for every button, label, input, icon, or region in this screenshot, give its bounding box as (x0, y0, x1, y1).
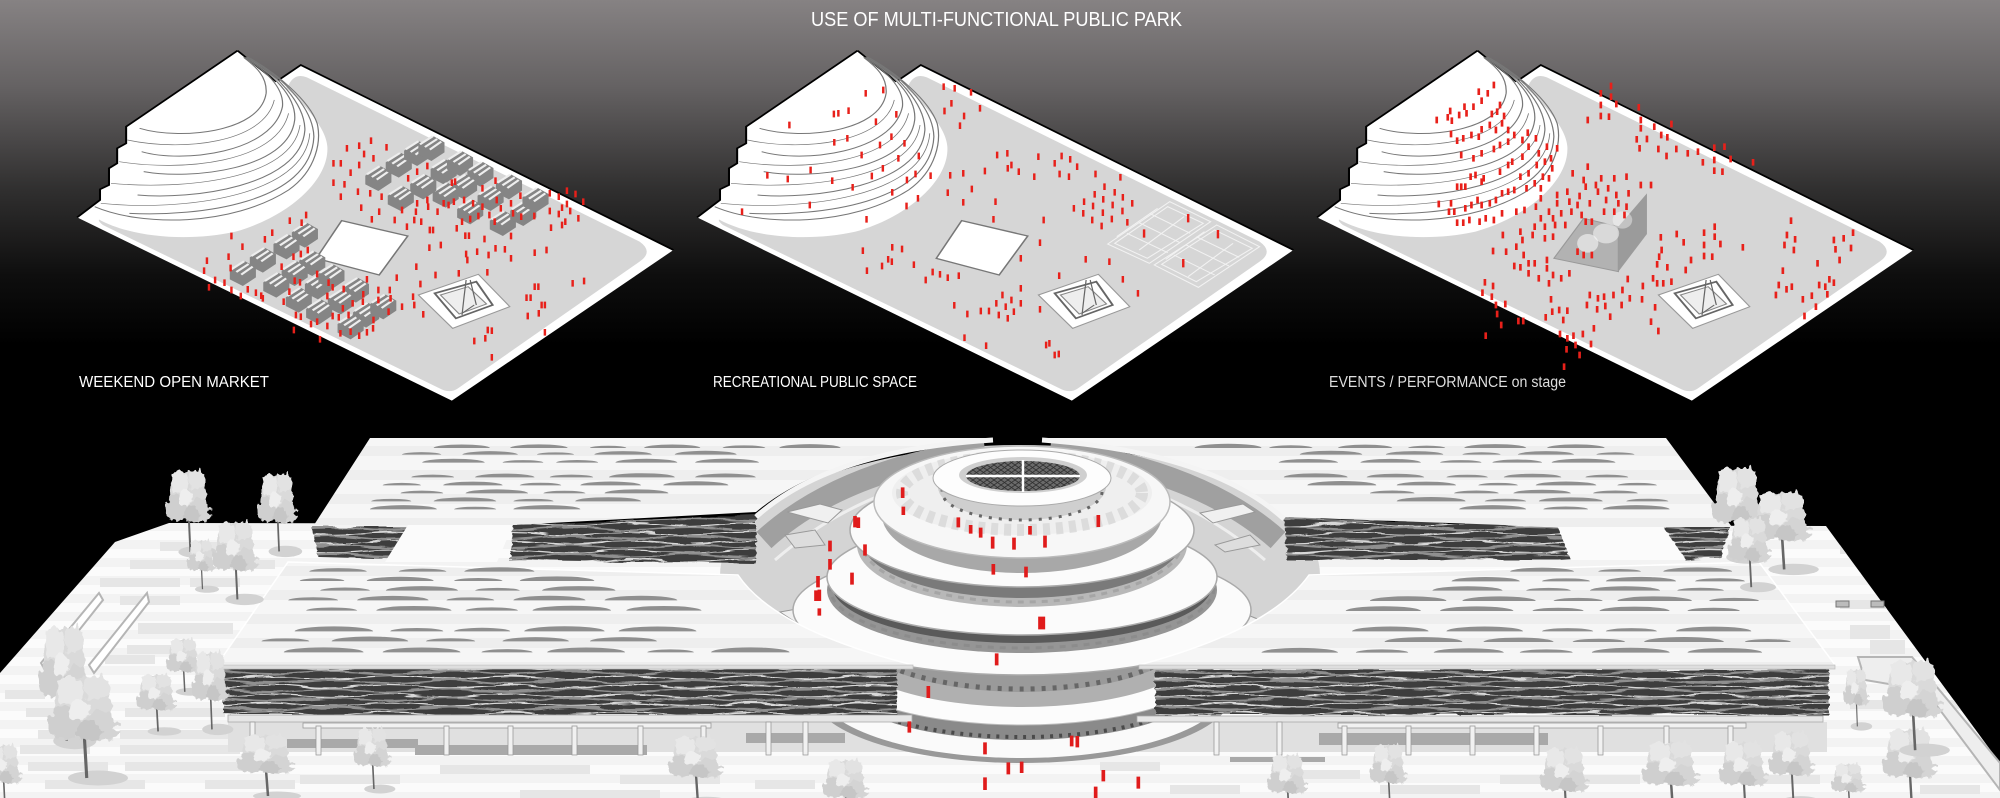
market stalls (230, 136, 549, 339)
sports courts (1108, 202, 1260, 287)
panel: weekend open market (77, 51, 673, 401)
label: weekend open market: WEEKEND OPEN MARKET (79, 374, 270, 391)
skylights front left (261, 567, 790, 652)
top ring (933, 450, 1111, 506)
roof fascias (217, 665, 1835, 669)
red people on building (816, 487, 1138, 798)
ring gallery (756, 440, 1284, 560)
skylight (966, 461, 1080, 491)
panel: events and performance on stage (1317, 51, 1913, 401)
benches (1836, 601, 1884, 607)
columns and beams (250, 722, 1746, 755)
skylights back left (370, 444, 841, 509)
tier 4 garden (874, 446, 1170, 558)
ramps (41, 593, 2000, 790)
label: recreational public space: RECREATIONAL PUBLIC SPACE (713, 374, 917, 391)
label: events performance on stage: EVENTS / PERFORMANCE on stage (1329, 374, 1566, 391)
stage (1554, 193, 1647, 272)
back roof right (1042, 438, 1732, 527)
red people (1437, 82, 1853, 370)
front roof left (217, 562, 913, 665)
slabs (228, 715, 1823, 722)
plaza ground (0, 520, 2000, 798)
tier 3 (850, 473, 1194, 587)
base tiers (812, 623, 1232, 763)
trees right (1267, 467, 1950, 798)
trees left (0, 470, 874, 798)
front facade left (223, 668, 897, 715)
red people (742, 83, 1218, 358)
skylights front right (1261, 567, 1791, 653)
back facade left end (312, 527, 408, 559)
link bridge (385, 525, 513, 562)
panel: building perspective (0, 438, 2000, 798)
title: USE OF MULTI-FUNCTIONAL PUBLIC PARK (811, 8, 1182, 31)
back facade right end (1663, 527, 1730, 560)
rotunda (793, 446, 1251, 763)
skylights back right (1195, 444, 1670, 509)
back facade right (1284, 517, 1571, 560)
back facade left (510, 515, 756, 563)
drum (938, 454, 1106, 520)
front roof right (1139, 562, 1835, 665)
front facade right (1155, 670, 1829, 715)
red people (204, 137, 584, 361)
panel: recreational public space (697, 51, 1293, 401)
courtyard (720, 445, 1320, 705)
tier 2 (827, 519, 1217, 635)
bridges (780, 504, 1260, 627)
tier 1 (793, 545, 1251, 675)
back roof left (314, 438, 993, 525)
